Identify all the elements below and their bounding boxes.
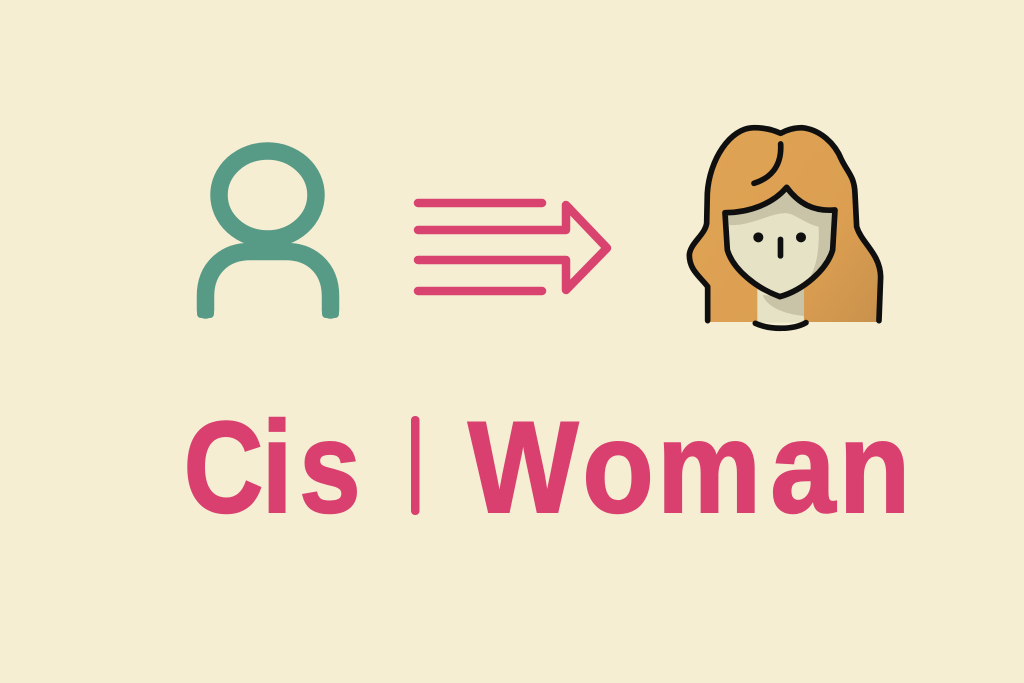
title: Cis | Woman bbox=[184, 395, 910, 540]
hair bbox=[689, 128, 881, 322]
outlines bbox=[689, 128, 881, 328]
icon: person outline bbox=[199, 151, 337, 316]
neck shadow bbox=[763, 287, 804, 316]
title: Cis | Woman: Cis bbox=[184, 395, 361, 540]
arrow: transition arrow with speed lines bbox=[418, 203, 607, 291]
face shadow bbox=[727, 187, 835, 291]
eyes and nose bbox=[753, 232, 806, 259]
title: Cis | Woman: Woman bbox=[468, 395, 910, 540]
icon: woman with long hair bbox=[689, 128, 881, 328]
neck bbox=[757, 287, 804, 323]
face bbox=[725, 187, 835, 297]
